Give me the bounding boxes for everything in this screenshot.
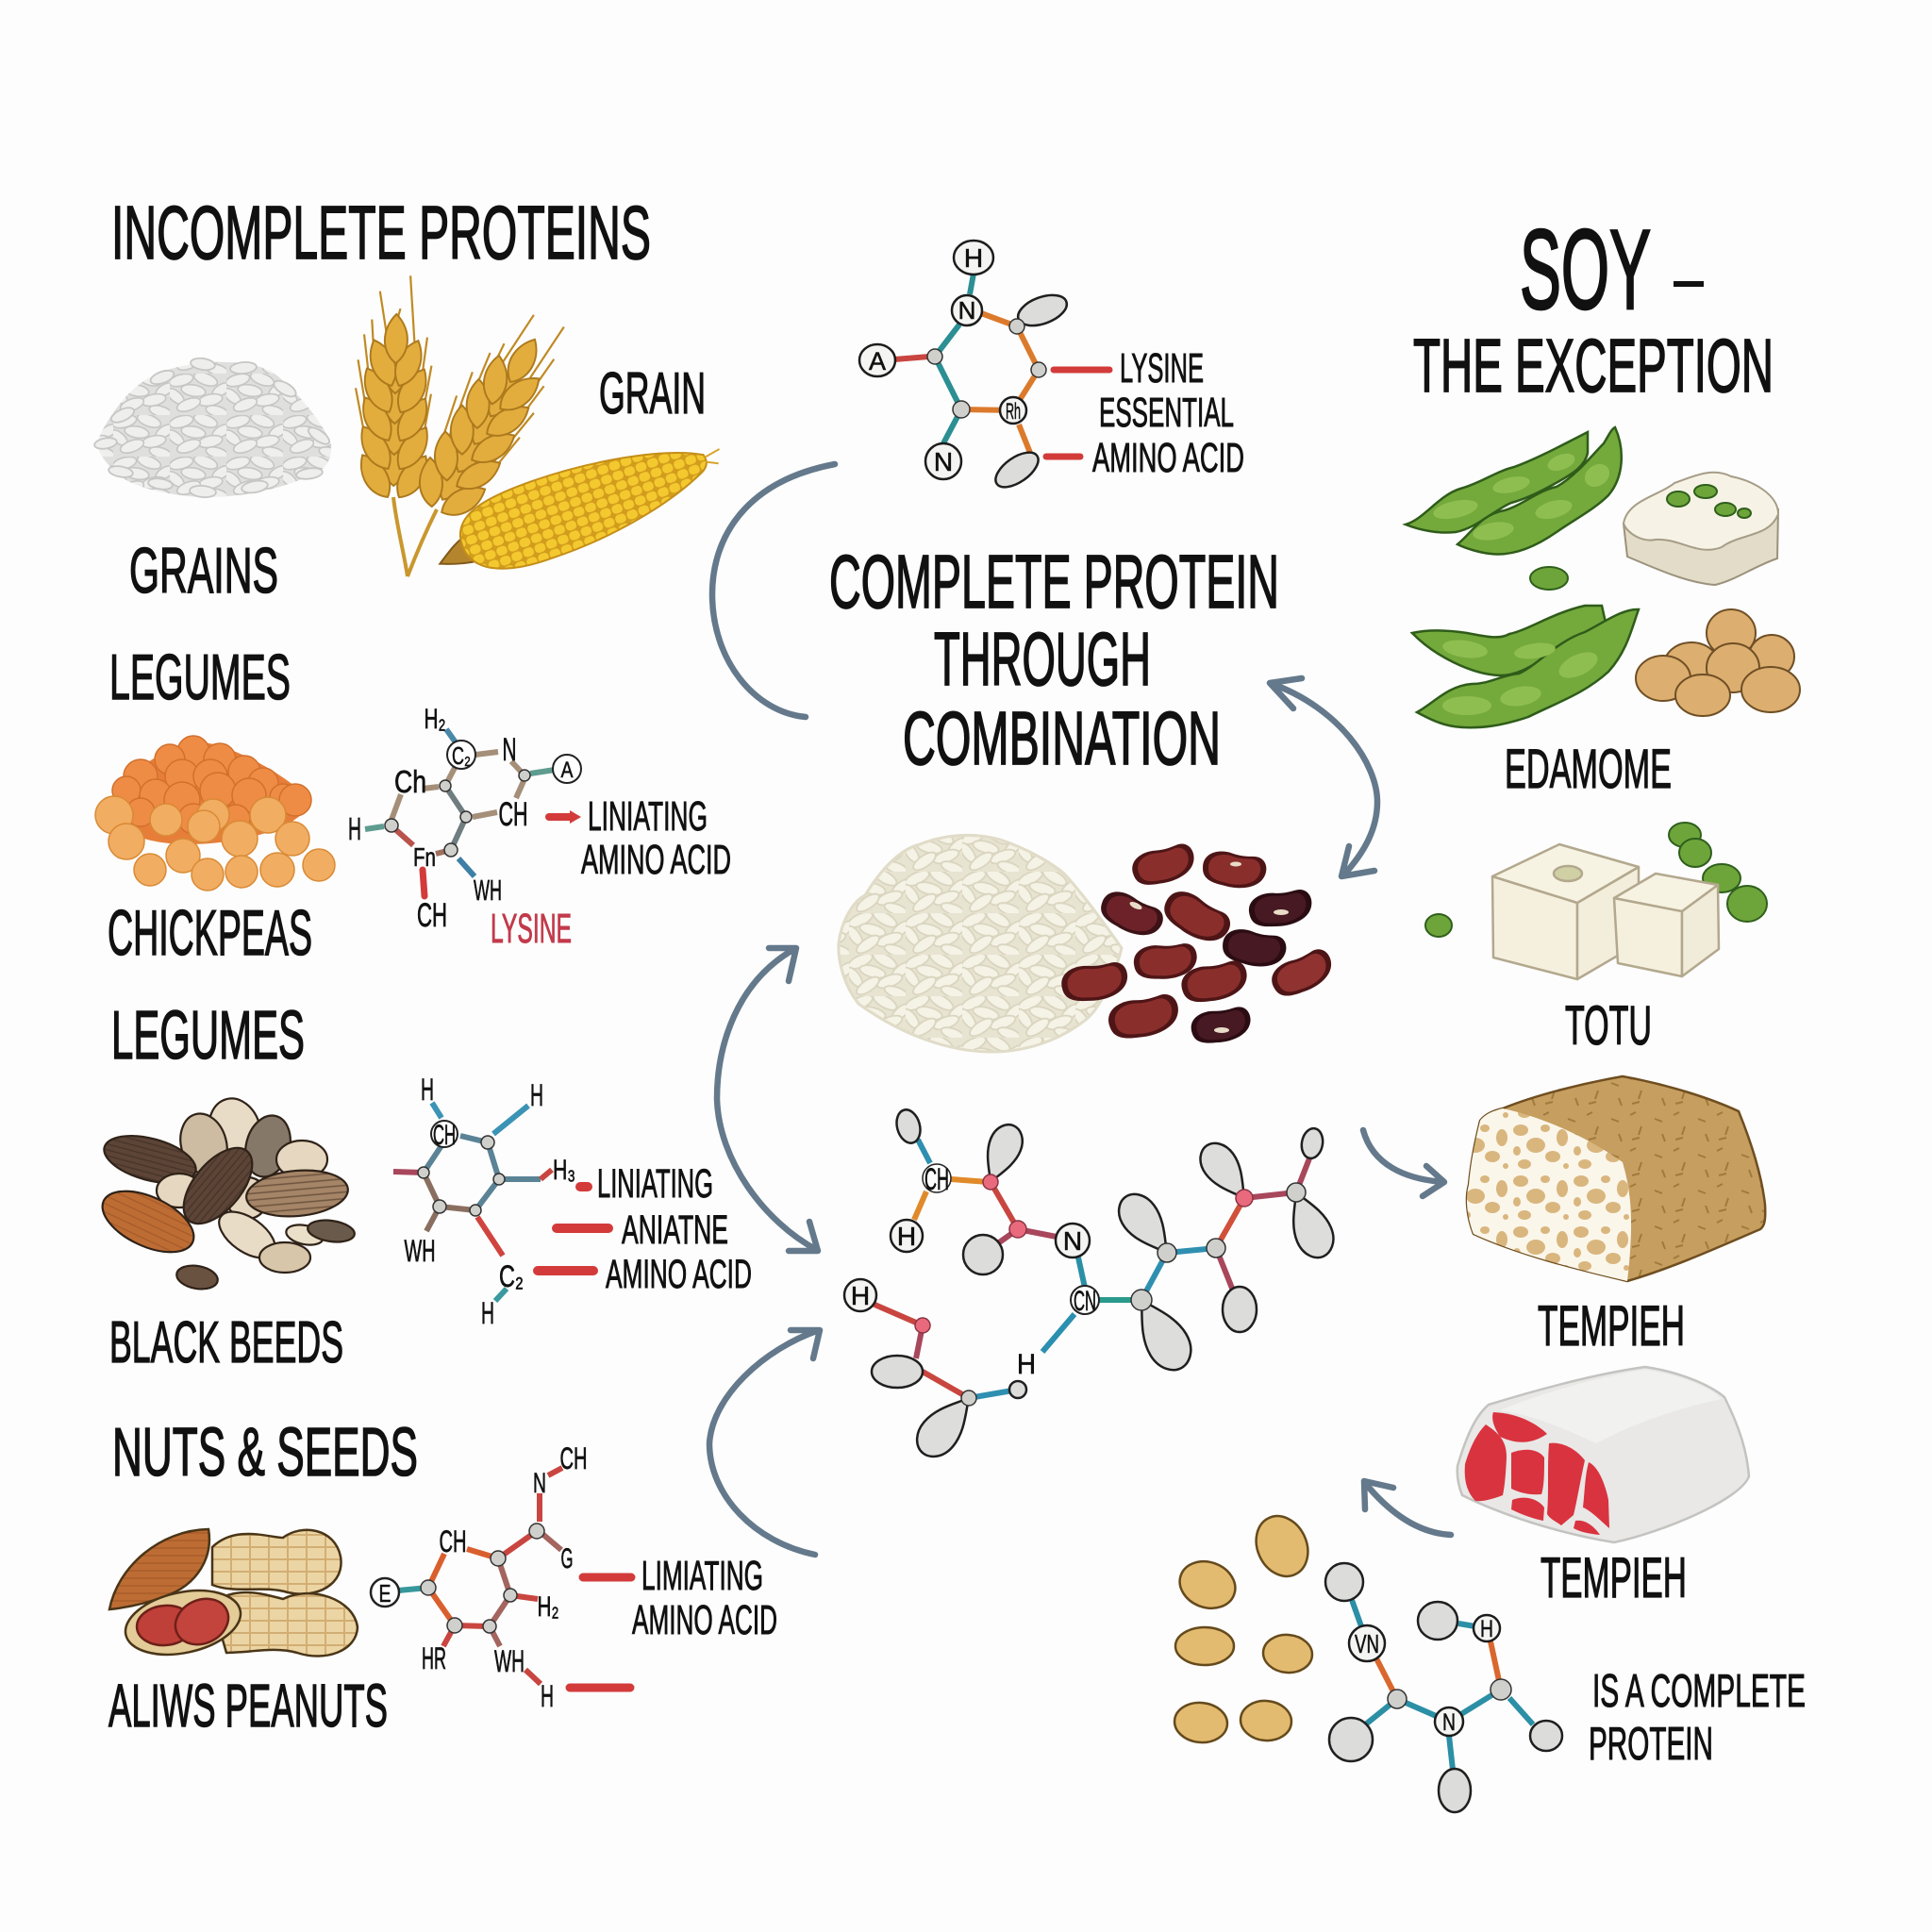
- label: amino acid 2: AMINO ACID: [606, 1252, 752, 1297]
- panel: incomplete proteins: [93, 191, 777, 1740]
- molecule: legume structure: CH: [433, 1120, 456, 1151]
- illustration: rice pile: [93, 357, 332, 498]
- label: grain: GRAIN: [599, 361, 706, 426]
- label: amino acid 3: AMINO ACID: [632, 1597, 777, 1643]
- panel: soy the exception: [1173, 207, 1806, 1812]
- molecule: soy protein: [1325, 1563, 1562, 1812]
- molecule: complete protein chain: H: [897, 1222, 916, 1251]
- label: limiting amino acid 1: LINIATING: [588, 793, 708, 840]
- heading: complete protein through combination: THROUGH: [934, 617, 1151, 701]
- molecule: complete protein chain: N: [1063, 1226, 1082, 1256]
- heading: nuts and seeds: NUTS & SEEDS: [112, 1415, 418, 1491]
- arrow: lower left curve: [709, 1330, 820, 1555]
- molecule: peanut structure: H₂: [538, 1591, 558, 1623]
- molecule: lysine structure: CH: [498, 796, 528, 833]
- molecule: peanut structure: CH: [560, 1441, 587, 1475]
- molecule: complete protein chain: [844, 1108, 1341, 1465]
- label: black beeds: BLACK BEEDS: [109, 1310, 343, 1375]
- illustration: kidney beans: [1059, 841, 1339, 1047]
- label: grains: GRAINS: [129, 535, 278, 607]
- label: is a complete protein: IS A COMPLETE: [1592, 1666, 1806, 1717]
- illustration: scattered soybeans: [1173, 1507, 1318, 1744]
- illustration: tofu cubes: [1425, 823, 1767, 979]
- illustration: meat cut: [1457, 1367, 1749, 1542]
- label: totu: TOTU: [1565, 995, 1652, 1057]
- label: amino acid 1: AMINO ACID: [581, 837, 731, 883]
- molecule: lysine structure: A: [560, 758, 574, 783]
- heading: complete protein through combination: [829, 540, 1279, 780]
- label: chickpeas: CHICKPEAS: [108, 897, 312, 969]
- molecule: lysine essential amino acid: H: [964, 243, 983, 273]
- label: edamome: EDAMOME: [1505, 739, 1672, 800]
- label: aniatne: ANIATNE: [622, 1208, 728, 1253]
- molecule: lysine structure: Fn: [413, 842, 436, 872]
- molecule: peanut structure: HR: [422, 1641, 446, 1675]
- molecule: complete protein chain: CN: [1074, 1286, 1096, 1317]
- heading: incomplete proteins: INCOMPLETE PROTEINS: [111, 191, 651, 275]
- illustration: tempeh block: [1453, 1076, 1765, 1292]
- molecule: lysine essential amino acid: [859, 241, 1109, 494]
- illustration: soybeans: [1636, 609, 1800, 716]
- molecule: legume structure: C₂: [499, 1259, 524, 1293]
- label: tempieh 2: TEMPIEH: [1541, 1546, 1687, 1609]
- molecule: lysine essential amino acid: Rh: [1006, 399, 1021, 425]
- molecule: soy protein: H: [1480, 1616, 1493, 1642]
- molecule: legume structure: WH: [404, 1234, 436, 1268]
- illustration: corn cob: [425, 417, 735, 595]
- illustration: wheat ears: [352, 275, 583, 576]
- molecule: lysine essential amino acid: N: [934, 447, 953, 476]
- label: is a complete protein: [1589, 1666, 1806, 1770]
- molecule: lysine essential amino acid: A: [869, 347, 886, 375]
- arrow: top left curve: [712, 464, 835, 717]
- molecule: lysine structure: Ch: [394, 764, 426, 799]
- molecule: peanut structure: WH: [494, 1644, 525, 1678]
- illustration: edamame pods: [1406, 427, 1639, 727]
- label: lysine: LYSINE: [1120, 345, 1204, 391]
- heading dash: [1674, 281, 1704, 287]
- arrow: right double curve: [1270, 678, 1377, 876]
- illustration: mixed seeds: [93, 1092, 356, 1292]
- molecule: legume structure: H: [421, 1073, 434, 1107]
- label: essential: ESSENTIAL: [1099, 390, 1234, 436]
- panel: complete protein: [829, 241, 1341, 1465]
- molecule: lysine essential amino acid: N: [958, 296, 975, 325]
- molecule: lysine structure: [348, 704, 581, 934]
- molecule: lysine structure: H₂: [425, 704, 445, 735]
- molecule: lysine structure: C₂: [452, 741, 471, 770]
- label: liniating: LINIATING: [597, 1161, 713, 1207]
- heading: soy: SOY: [1520, 207, 1651, 333]
- label: tempieh 1: TEMPIEH: [1538, 1294, 1685, 1357]
- molecule: peanut structure: [371, 1441, 631, 1713]
- illustration: rice pile, combined: [839, 835, 1122, 1052]
- molecule: complete protein chain: H: [851, 1281, 870, 1310]
- arrow: from meat: [1364, 1481, 1451, 1535]
- molecule: peanut structure: N: [533, 1468, 546, 1499]
- molecule: complete protein chain: CH: [924, 1162, 949, 1196]
- heading: legumes 2: LEGUMES: [111, 998, 305, 1074]
- molecule: legume structure: [393, 1073, 608, 1330]
- heading: legumes: LEGUMES: [109, 641, 291, 713]
- molecule: peanut structure: E: [379, 1579, 391, 1607]
- label: limiating: LIMIATING: [641, 1553, 763, 1599]
- molecule: peanut structure: G: [560, 1543, 574, 1574]
- label: amino acid: AMINO ACID: [1092, 435, 1244, 481]
- molecule: complete protein chain: H: [1017, 1349, 1036, 1380]
- heading: complete protein through combination: COMBINATION: [903, 696, 1221, 780]
- label: aliws peanuts: ALIWS PEANUTS: [108, 1672, 388, 1740]
- molecule: legume structure: H: [530, 1078, 543, 1112]
- molecule: soy protein: VN: [1355, 1629, 1379, 1658]
- illustration: red lentils: [95, 736, 335, 891]
- molecule: lysine structure: N: [502, 732, 517, 768]
- label: lysine, red: LYSINE: [491, 906, 572, 952]
- arrow: to tempeh: [1363, 1130, 1444, 1196]
- molecule: peanut structure: H: [541, 1679, 554, 1713]
- molecule: lysine structure: WH: [474, 874, 502, 907]
- illustration: almond and peanuts: [109, 1529, 358, 1664]
- label: is a complete protein: PROTEIN: [1589, 1719, 1713, 1770]
- molecule: peanut structure: CH: [440, 1524, 466, 1558]
- molecule: legume structure: H: [481, 1296, 494, 1330]
- illustration: soy slab: [1624, 473, 1778, 585]
- arrow: left double curve: [717, 948, 818, 1251]
- molecule: lysine structure: H: [348, 811, 361, 846]
- molecule: lysine structure: CH: [417, 897, 447, 934]
- molecule: soy protein: N: [1442, 1709, 1456, 1736]
- molecule: legume structure: H₃: [553, 1155, 575, 1186]
- heading: complete protein through combination: COMPLETE PROTEIN: [829, 540, 1279, 624]
